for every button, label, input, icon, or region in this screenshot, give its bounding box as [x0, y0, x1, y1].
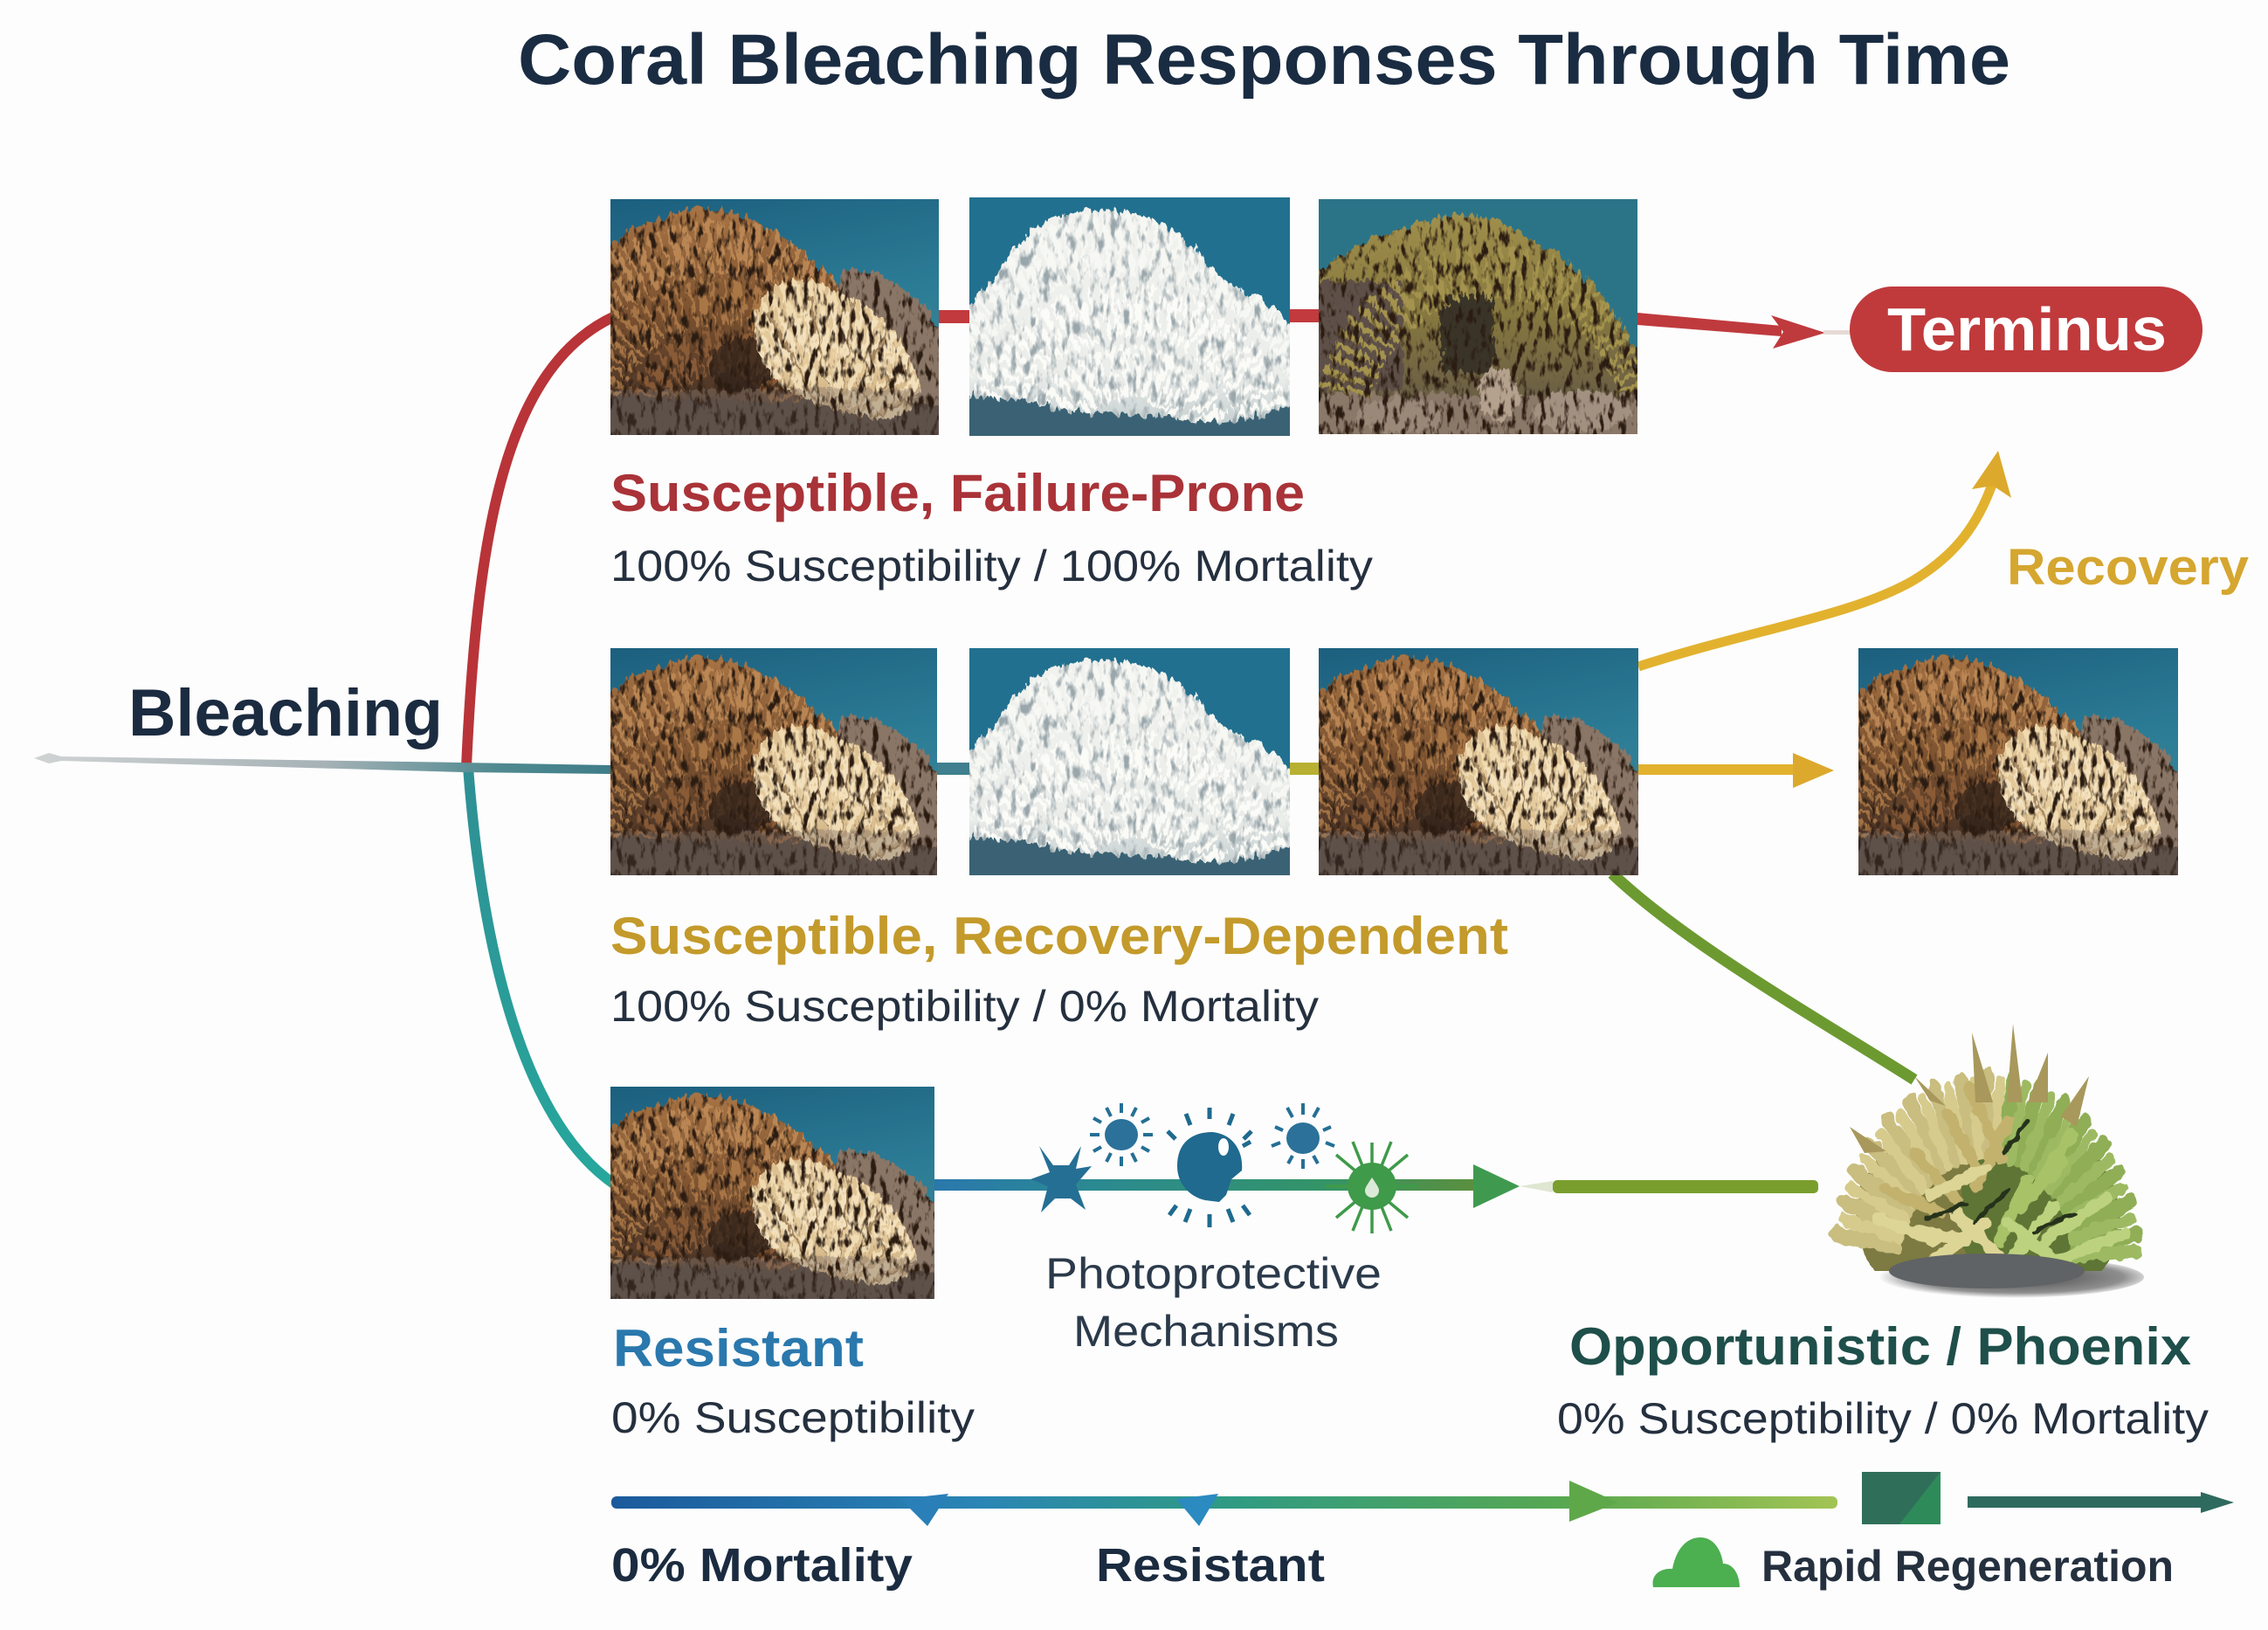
square marker [1862, 1472, 1941, 1524]
stats: opportunistic / phoenix: 0% Susceptibility / 0% Mortality [1557, 1394, 2209, 1443]
label: 0% mortality: 0% Mortality [611, 1539, 913, 1592]
row 2 photos [541, 648, 2217, 1087]
row 2 connectors and arrows [934, 753, 1914, 1080]
marker triangle [1176, 1494, 1218, 1526]
top spikes [1850, 1024, 2089, 1153]
label: photoprotective mechanisms: Photoprotective [1045, 1249, 1382, 1298]
red branch curve [466, 316, 615, 767]
label: photoprotective mechanisms [1045, 1249, 1382, 1356]
outer branches [1837, 1077, 1987, 1247]
title: Coral Bleaching Responses Through Time [518, 20, 2010, 100]
phoenix coral [1837, 1024, 2147, 1313]
photo: recovered coral [1251, 648, 1678, 1051]
heading: recovery-dependent: Susceptible, Recovery-Dependent [610, 907, 1508, 965]
icon: small sun [1090, 1103, 1153, 1166]
stats: recovery-dependent: 100% Susceptibility / 0% Mortality [610, 982, 1319, 1031]
ground shadow [1865, 1256, 2144, 1298]
arrow to terminus [1637, 313, 1782, 336]
icon: green cloud [1653, 1537, 1740, 1587]
icon: green virus [1326, 1142, 1418, 1233]
row 3 mechanism line [933, 1164, 1818, 1208]
straight arrow shaft [1638, 764, 1804, 775]
rock base [1889, 1254, 2085, 1288]
photo: recovered outcome [1790, 648, 2217, 1051]
coral branches [1828, 1024, 2143, 1271]
label: photoprotective mechanisms: Mechanisms [1073, 1307, 1339, 1356]
label: resistant: Resistant [1096, 1539, 1325, 1592]
arrow head [1771, 315, 1825, 349]
straight arrow head [1793, 753, 1834, 788]
pill shape [1850, 287, 2203, 372]
terminus pill [1850, 287, 2203, 372]
row 1 photos [541, 197, 1646, 658]
faint link [1823, 330, 1851, 335]
photo: healthy coral [541, 648, 977, 1051]
connector [1286, 763, 1323, 775]
right arrow marker [1569, 1481, 1618, 1522]
line [933, 1179, 1476, 1191]
photo: healthy coral [541, 199, 979, 618]
heading: opportunistic / phoenix: Opportunistic / Phoenix [1569, 1317, 2191, 1376]
marker triangle [900, 1494, 948, 1526]
recovery arrow [1638, 451, 2011, 667]
bleaching stem line [34, 753, 610, 774]
green bar [1553, 1180, 1818, 1193]
photo: bleached coral [921, 648, 1332, 1087]
photo: dead coral [1310, 199, 1646, 577]
connector [934, 310, 974, 323]
connector [1286, 309, 1323, 322]
end arrow shaft [1968, 1496, 2208, 1508]
stats: resistant: 0% Susceptibility [611, 1393, 975, 1442]
icon: large cell [1168, 1108, 1251, 1227]
icon: star cell [1031, 1146, 1092, 1212]
arrow head [1972, 451, 2011, 498]
curve [1638, 482, 1993, 667]
gradient bar [611, 1496, 1837, 1509]
heading: failure-prone: Susceptible, Failure-Prone [610, 464, 1305, 522]
bottom scale [611, 1472, 2234, 1526]
heading: resistant: Resistant [613, 1319, 864, 1378]
pill text: Terminus [1887, 295, 2167, 363]
label: Bleaching: Bleaching [128, 676, 443, 750]
connector [934, 763, 974, 775]
row 1 connectors and terminus arrow [934, 309, 1851, 349]
photoprotective icons [1031, 1103, 1418, 1233]
branching pathways from bleaching [34, 316, 615, 1185]
end arrow head [2201, 1492, 2234, 1513]
icon: small sun [1272, 1103, 1334, 1169]
stats: failure-prone: 100% Susceptibility / 100% Mortality [610, 542, 1373, 591]
inner messy branches [1878, 1088, 2124, 1262]
label: recovery: Recovery [2007, 539, 2249, 596]
photo: bleached coral [921, 197, 1332, 658]
arrow head [1473, 1164, 1520, 1208]
teal branch curve [468, 767, 615, 1185]
faint link [1520, 1181, 1553, 1192]
row 3 photo: resistant coral [541, 1087, 975, 1463]
green path to phoenix [1612, 874, 1914, 1080]
label: rapid regeneration: Rapid Regeneration [1761, 1542, 2174, 1591]
